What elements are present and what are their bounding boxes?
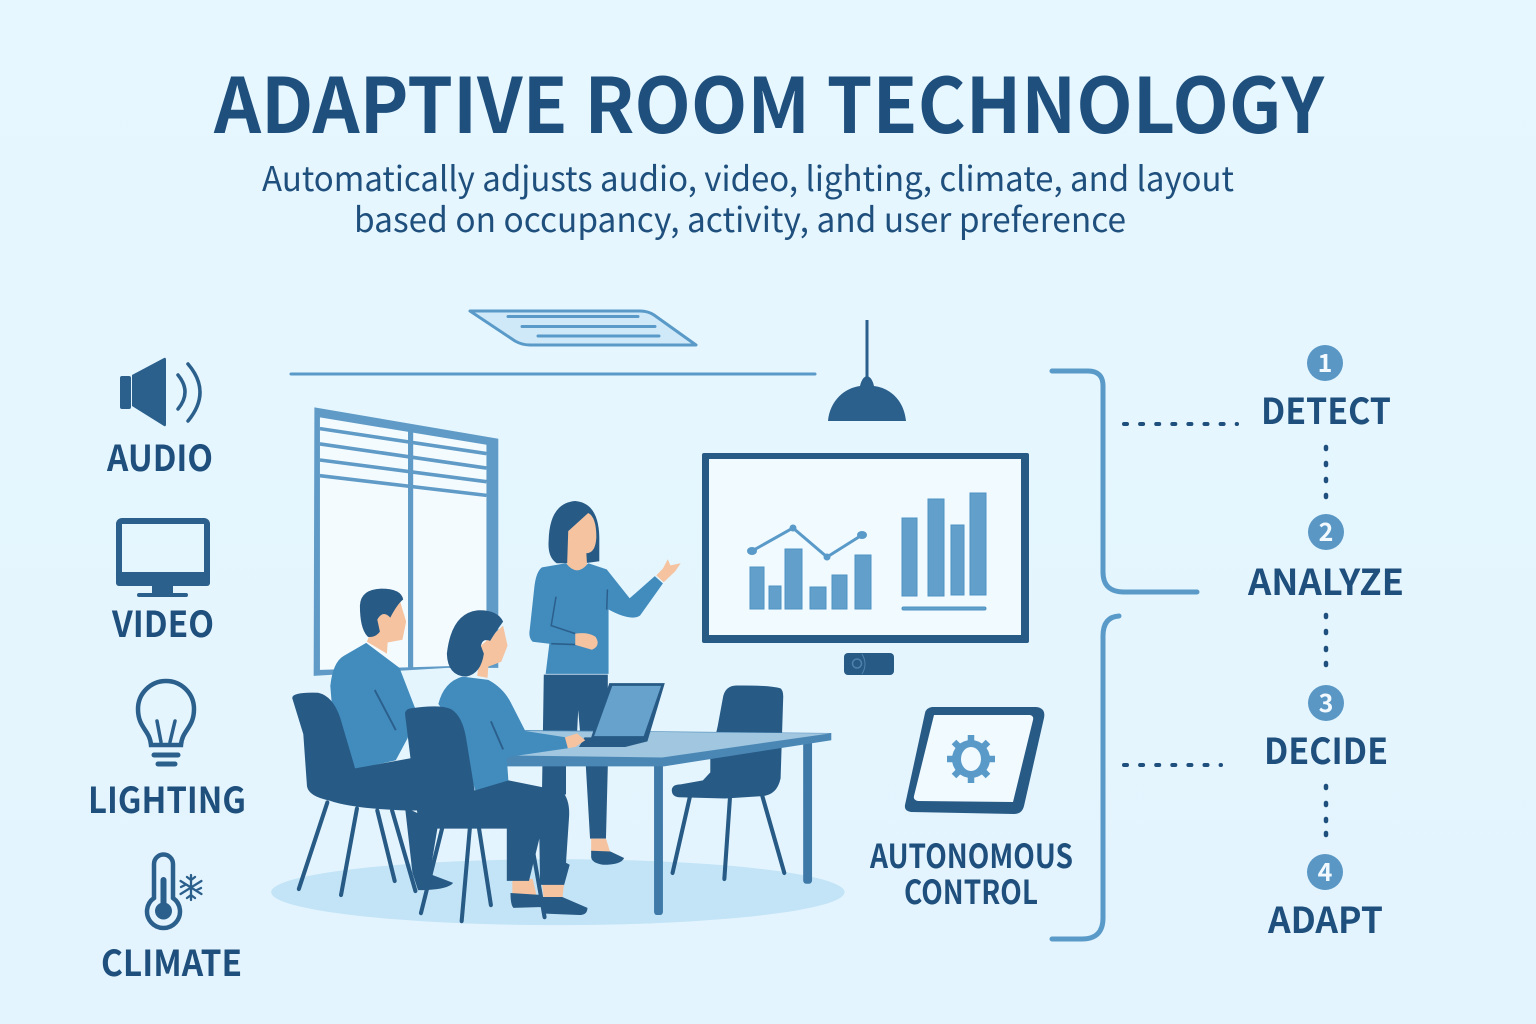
icon: speaker <box>120 358 200 426</box>
label: autonomous control <box>869 830 1073 914</box>
bracket: lower <box>1052 616 1119 939</box>
window with blinds <box>314 407 498 676</box>
presenter hair back <box>548 501 599 563</box>
label: lighting: LIGHTING <box>88 772 246 824</box>
step 1: 1 <box>1318 344 1332 380</box>
seated woman <box>438 610 585 790</box>
step 4: 4 <box>1318 853 1333 889</box>
line chart <box>747 524 867 560</box>
pendant lamp <box>828 320 906 421</box>
presenter raised hand <box>656 559 681 582</box>
step 2: ANALYZE <box>1247 554 1404 606</box>
presenter forearm hand <box>575 633 598 650</box>
subtitle: based on occupancy, activity, and user preference <box>354 193 1126 242</box>
front chair and woman's legs <box>405 706 587 921</box>
dotted connector: decide <box>1124 763 1221 767</box>
man hair <box>360 589 403 637</box>
gear icon <box>947 735 995 783</box>
step 3: 3 <box>1319 684 1333 720</box>
presenter face and neck <box>567 513 596 573</box>
woman sweater <box>438 677 568 790</box>
woman hair <box>447 610 503 677</box>
subtitle: Automatically adjusts audio, video, lighting, climate, and layout <box>262 152 1234 201</box>
step 2: 2 <box>1319 513 1333 549</box>
dotted connector: detect <box>1124 422 1237 426</box>
laptop <box>579 683 665 747</box>
step 2 <box>1247 513 1404 606</box>
floor ellipse <box>271 859 845 925</box>
process steps <box>1247 344 1404 944</box>
step 3 <box>1264 684 1388 775</box>
presenter sweater <box>529 563 663 674</box>
title: ADAPTIVE ROOM TECHNOLOGY <box>213 45 1325 155</box>
left bar chart <box>750 549 871 609</box>
left chair and man's legs <box>292 693 453 895</box>
step 1: DETECT <box>1261 383 1391 435</box>
presenter ankle and shoe <box>591 839 610 853</box>
label: video: VIDEO <box>111 596 214 648</box>
ceiling line <box>291 372 815 376</box>
label: audio: AUDIO <box>106 430 213 482</box>
woman ankles <box>512 879 564 899</box>
right bar chart <box>902 493 986 610</box>
man neck and face <box>367 599 406 654</box>
connector 2 to 3 <box>1324 615 1328 665</box>
icon: light bulb <box>138 681 194 764</box>
panel: adaptive features <box>88 358 246 987</box>
connector 3 to 4 <box>1324 786 1328 835</box>
label: autonomous control: CONTROL <box>904 866 1038 914</box>
scene: meeting room floor, window, people and furniture <box>271 407 845 925</box>
right chair <box>672 685 784 879</box>
label: autonomous control: AUTONOMOUS <box>869 830 1073 878</box>
ceiling air vent <box>470 311 696 345</box>
front chair back and seat <box>405 706 570 885</box>
subtitle <box>262 152 1234 242</box>
step 3: DECIDE <box>1264 723 1388 775</box>
icon: monitor <box>116 521 210 597</box>
front chair legs <box>421 829 545 921</box>
woman shoes <box>510 893 587 915</box>
camera <box>844 653 894 675</box>
step 4 <box>1267 853 1383 944</box>
presenter trousers <box>542 675 608 839</box>
step 4: ADAPT <box>1267 892 1383 944</box>
woman hand <box>565 733 585 748</box>
table <box>505 730 831 915</box>
wall display with charts <box>702 453 1029 643</box>
bracket: upper <box>1052 371 1197 592</box>
step 1 <box>1261 344 1391 435</box>
tablet with gear <box>905 707 1044 814</box>
icon: thermometer and snowflake <box>147 855 201 928</box>
seated man <box>330 589 415 770</box>
connector 1 to 2 <box>1324 447 1328 497</box>
presenter <box>529 501 681 865</box>
woman neck and face <box>477 626 508 678</box>
man torso <box>330 643 415 770</box>
label: climate: CLIMATE <box>101 935 242 987</box>
